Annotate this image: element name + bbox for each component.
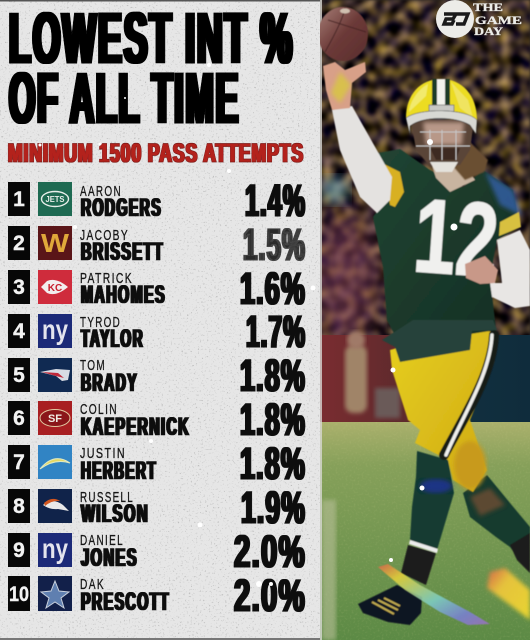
neck and chin bbox=[432, 166, 476, 193]
row 7: Justin Herbert: 1.8% bbox=[240, 438, 306, 489]
ankle bbox=[401, 545, 436, 585]
rank: 1 bbox=[13, 188, 25, 211]
row 5: Tom Brady: BRADY bbox=[81, 369, 138, 397]
rank bbox=[8, 489, 30, 523]
The Game Day logo: GAME bbox=[475, 13, 522, 27]
row 5: Tom Brady: 1.8% bbox=[240, 350, 306, 401]
row 1: Aaron Rodgers: 1.4% bbox=[245, 175, 306, 226]
pants stripe bbox=[444, 335, 494, 455]
title bbox=[9, 0, 294, 139]
stadium wall bbox=[320, 331, 530, 422]
row 9: Daniel Jones bbox=[8, 526, 306, 577]
icon: Chargers logo bbox=[38, 445, 72, 479]
left edge strip bbox=[320, 0, 322, 640]
title: OF ALL TIME bbox=[9, 59, 240, 139]
row 8: Russell Wilson bbox=[8, 482, 306, 533]
row 10: Dak Prescott: 2.0% bbox=[234, 570, 306, 621]
rank bbox=[8, 358, 30, 392]
cleat bbox=[358, 585, 422, 625]
player bbox=[318, 7, 530, 625]
row 3: Patrick Mahomes: 1.6% bbox=[240, 263, 306, 314]
rank: 8 bbox=[13, 495, 25, 518]
throwing hand bbox=[323, 62, 366, 110]
icon: Chiefs logo: KC bbox=[48, 283, 62, 294]
left leg bbox=[410, 451, 454, 550]
icon: Patriots logo bbox=[38, 358, 72, 392]
face bbox=[411, 120, 474, 172]
row 5: Tom Brady: TOM bbox=[80, 357, 106, 374]
row 3: Patrick Mahomes: MAHOMES bbox=[81, 281, 166, 309]
row 4: Tyrod Taylor bbox=[8, 306, 306, 357]
rank: 9 bbox=[13, 539, 25, 562]
right leg bbox=[463, 475, 530, 573]
icon: Jets logo: JETS bbox=[46, 195, 65, 204]
row 8: Russell Wilson: RUSSELL bbox=[80, 489, 134, 506]
row 4: Tyrod Taylor: TAYLOR bbox=[81, 325, 144, 353]
icon: Commanders logo: W bbox=[41, 228, 70, 258]
throwing arm sleeve bbox=[332, 106, 392, 213]
icon: Giants logo: ny bbox=[42, 533, 68, 564]
row 7: Justin Herbert: HERBERT bbox=[81, 457, 157, 485]
The Game Day logo bbox=[436, 0, 522, 38]
rank: 7 bbox=[13, 451, 25, 474]
The Game Day logo: DAY bbox=[474, 24, 503, 38]
row 2: Jacoby Brissett bbox=[8, 219, 306, 270]
row 1: Aaron Rodgers: RODGERS bbox=[81, 194, 162, 222]
right hand bbox=[465, 256, 498, 284]
jersey bbox=[373, 149, 520, 345]
right forearm bbox=[490, 230, 530, 308]
rainbow light streak bbox=[487, 568, 530, 620]
rank bbox=[8, 445, 30, 479]
rank: 4 bbox=[13, 320, 25, 343]
icon: Broncos logo bbox=[38, 489, 72, 523]
rank bbox=[8, 182, 30, 216]
icon: Commanders logo bbox=[38, 226, 72, 260]
rank: 5 bbox=[13, 364, 25, 387]
rank bbox=[8, 314, 30, 348]
row 1: Aaron Rodgers bbox=[8, 175, 306, 226]
row 6: Colin Kaepernick bbox=[8, 394, 306, 445]
row 3: Patrick Mahomes bbox=[8, 263, 306, 314]
icon: 49ers logo bbox=[38, 401, 72, 435]
row 7: Justin Herbert: JUSTIN bbox=[80, 445, 126, 462]
rank bbox=[8, 533, 30, 567]
row 2: Jacoby Brissett: 1.5% bbox=[243, 219, 306, 270]
icon: Jets logo bbox=[38, 182, 72, 216]
row 9: Daniel Jones: 2.0% bbox=[234, 526, 306, 577]
row 2: Jacoby Brissett: BRISSETT bbox=[81, 238, 164, 266]
row 2: Jacoby Brissett: JACOBY bbox=[80, 227, 129, 244]
rank: 6 bbox=[13, 407, 25, 430]
rank: 3 bbox=[13, 276, 25, 299]
rank bbox=[8, 270, 30, 304]
rainbow light streak bbox=[378, 564, 490, 625]
right foot bbox=[510, 533, 530, 573]
row 1: Aaron Rodgers: AARON bbox=[80, 183, 122, 200]
row 9: Daniel Jones: DANIEL bbox=[80, 532, 124, 549]
grass field bbox=[320, 422, 530, 640]
towel at waist bbox=[382, 320, 497, 362]
helmet bbox=[406, 79, 477, 135]
hair bbox=[452, 140, 488, 180]
photo: quarterback in stadium bbox=[310, 0, 530, 640]
yellow pants bbox=[390, 327, 497, 492]
row 6: Colin Kaepernick: COLIN bbox=[80, 401, 118, 418]
stadium crowd bbox=[310, 0, 530, 350]
row 6: Colin Kaepernick: KAEPERNICK bbox=[81, 413, 190, 441]
row 8: Russell Wilson: WILSON bbox=[81, 500, 149, 528]
row 10: Dak Prescott: DAK bbox=[80, 576, 105, 593]
icon: 49ers logo: SF bbox=[48, 413, 62, 425]
The Game Day logo: THE bbox=[473, 0, 503, 14]
subtitle: MINIMUM 1500 PASS ATTEMPTS bbox=[8, 138, 304, 168]
row 3: Patrick Mahomes: PATRICK bbox=[80, 270, 133, 287]
rank: 2 bbox=[13, 232, 25, 255]
row 4: Tyrod Taylor: 1.7% bbox=[246, 306, 306, 357]
row 9: Daniel Jones: JONES bbox=[81, 544, 138, 572]
icon: Chiefs logo bbox=[38, 270, 72, 304]
light specks bbox=[38, 63, 458, 587]
rank: 10 bbox=[9, 583, 29, 606]
row 6: Colin Kaepernick: 1.8% bbox=[240, 394, 306, 445]
row 10: Dak Prescott: PRESCOTT bbox=[81, 588, 170, 616]
icon: Cowboys logo bbox=[38, 576, 72, 611]
rank bbox=[8, 576, 30, 611]
rank bbox=[8, 226, 30, 260]
rank bbox=[8, 401, 30, 435]
row 8: Russell Wilson: 1.9% bbox=[241, 482, 306, 533]
row 5: Tom Brady bbox=[8, 350, 306, 401]
icon: Giants logo: ny bbox=[42, 314, 68, 345]
row 7: Justin Herbert bbox=[8, 438, 306, 489]
football bbox=[318, 7, 368, 61]
row 10: Dak Prescott bbox=[8, 570, 306, 621]
row 4: Tyrod Taylor: TYROD bbox=[80, 314, 121, 331]
